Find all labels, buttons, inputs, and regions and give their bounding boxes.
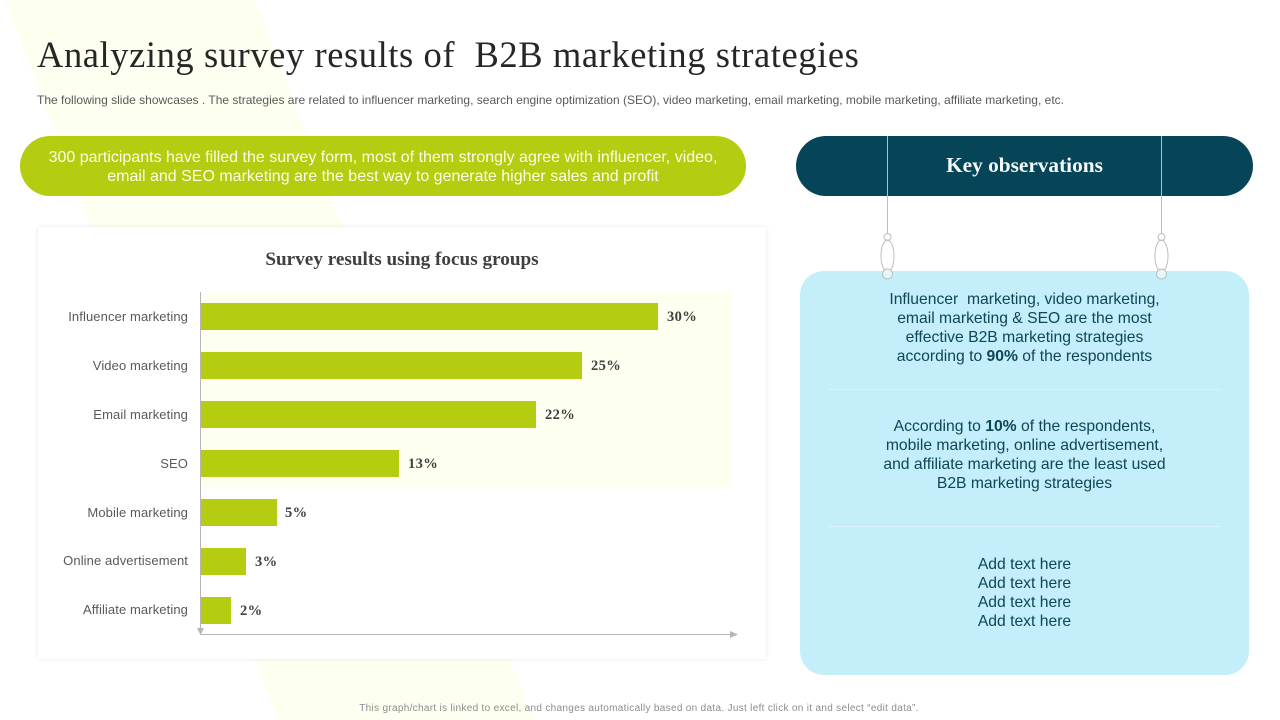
chart axes [197,292,738,638]
value: 30%: 30% [667,309,697,325]
bar: Affiliate marketing [201,597,231,624]
row label: Email marketing: Email marketing [93,407,188,422]
bar: Influencer marketing [201,303,658,330]
observation 1: Influencer marketing, video marketing, [889,291,1160,308]
observation 1: effective B2B marketing strategies [906,329,1143,346]
row label: SEO: SEO [160,456,188,471]
footnote: This graph/chart is linked to excel, and changes automatically based on data. Just left click on it and select “edit data”. [359,703,919,714]
chart title: Survey results using focus groups [265,249,539,270]
bar: Email marketing [201,401,536,428]
observation 3: Add text here [978,575,1071,592]
header: key observations: Key observations [946,153,1103,177]
row label: Affiliate marketing: Affiliate marketing [83,602,188,617]
callout: survey summary: 300 participants have filled the survey form, most of them strongly agree with influencer, video, [49,149,717,166]
panel: observations [800,271,1249,675]
observation 2: and affiliate marketing are the least used [883,456,1166,473]
value: 13%: 13% [408,456,438,472]
icon: hanging links [880,136,1168,280]
row label: Influencer marketing: Influencer marketing [68,309,188,324]
row label: Video marketing: Video marketing [93,358,188,373]
value: 2%: 2% [240,603,263,619]
observation 1: email marketing & SEO are the most [897,310,1152,327]
observation 1 [889,291,1160,365]
value: 5%: 5% [285,505,308,521]
callout: survey summary [20,136,746,196]
observation 3: Add text here [978,594,1071,611]
bar: Online advertisement [201,548,246,575]
value: 3%: 3% [255,554,278,570]
value: 22%: 22% [545,407,575,423]
bar: Mobile marketing [201,499,277,526]
bar: Video marketing [201,352,582,379]
observation 3: Add text here [978,556,1071,573]
observation 3: Add text here [978,613,1071,630]
observation 3 [978,556,1071,630]
header: key observations [796,136,1253,196]
panel: bar chart card [38,227,766,659]
bar: SEO [201,450,399,477]
observation 2: mobile marketing, online advertisement, [886,437,1163,454]
row label: Online advertisement: Online advertisement [63,553,188,568]
observation 1: according to 90% of the respondents [897,348,1152,365]
observation 2 [883,418,1166,492]
observation 2: B2B marketing strategies [937,475,1112,492]
chart highlight region [201,291,731,487]
row label: Mobile marketing: Mobile marketing [87,505,188,520]
subtitle: The following slide showcases . The strategies are related to influencer marketing, search engine optimization (SEO), video marketing, email marketing, mobile marketing, affiliate marketing, etc. [37,93,1064,107]
value: 25%: 25% [591,358,621,374]
observation 2: According to 10% of the respondents, [894,418,1155,435]
callout: survey summary: email and SEO marketing are the best way to generate higher sales and profit [107,168,659,185]
title: Analyzing survey results of B2B marketing strategies [37,34,859,75]
